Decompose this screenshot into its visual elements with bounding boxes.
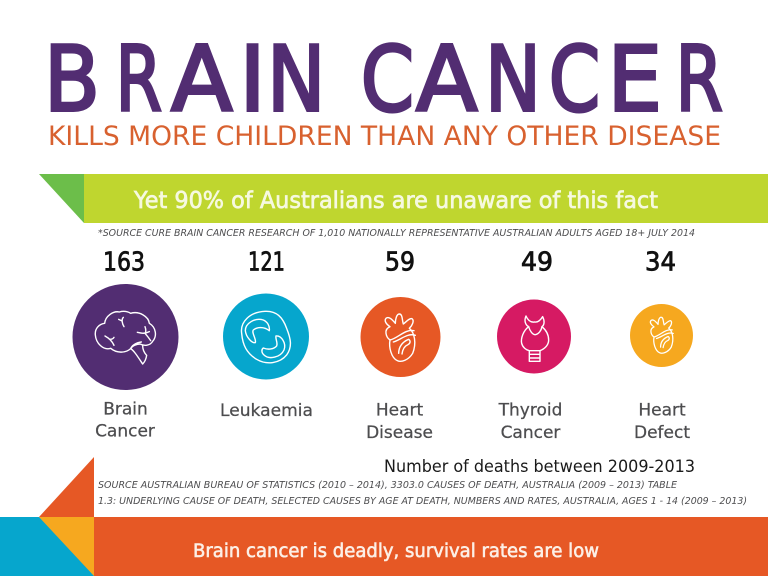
banner bar (94, 517, 768, 576)
banner text: Yet 90% of Australians are unaware of this fact (133, 186, 658, 214)
bottom banner (0, 457, 768, 576)
title: E (608, 28, 662, 132)
green banner (39, 174, 768, 223)
chart caption: Number of deaths between 2009-2013 (384, 457, 695, 476)
icon: brain (95, 311, 155, 364)
number 163: 163 (103, 248, 145, 278)
blue circle (223, 294, 309, 380)
title: N (485, 28, 541, 132)
number 59: 59 (385, 248, 415, 278)
blue corner block (0, 517, 94, 576)
yellow fold triangle (39, 517, 94, 576)
purple circle (72, 284, 178, 390)
title: I (239, 28, 266, 132)
title: B (44, 28, 100, 132)
yellow circle (630, 304, 693, 367)
label: Heart Disease: Disease (366, 423, 433, 443)
title: R (676, 28, 723, 132)
label: Heart Defect: Heart (638, 400, 686, 420)
icon: blood cell (241, 311, 290, 363)
label: Thyroid Cancer: Thyroid (498, 400, 562, 420)
banner text: Brain cancer is deadly, survival rates are low (193, 541, 599, 562)
title: C (549, 28, 600, 132)
label: Leukaemia: Leukaemia (220, 401, 313, 421)
panel: brain cancer (72, 248, 178, 442)
panel: thyroid cancer (497, 248, 571, 443)
panel: heart defect (630, 248, 693, 443)
panel: leukaemia (220, 248, 313, 421)
label: Brain Cancer: Cancer (95, 422, 155, 442)
mortality source note: 1.3: UNDERLYING CAUSE OF DEATH, SELECTED CAUSES BY AGE AT DEATH, NUMBERS AND RATES, AUSTRALIA, AGES 1 - 14 (2009 – 2013) (98, 496, 747, 507)
banner fold triangle (39, 174, 84, 223)
label: Thyroid Cancer: Cancer (501, 423, 560, 443)
title: C (361, 28, 414, 132)
title: A (171, 28, 233, 132)
mortality source note: SOURCE AUSTRALIAN BUREAU OF STATISTICS (2010 – 2014), 3303.0 CAUSES OF DEATH, AUSTRALIA (2009 – 2013) TABLE (98, 480, 678, 491)
icon: small heart (650, 317, 673, 353)
panel: heart disease (360, 248, 440, 443)
label: Heart Defect: Defect (634, 423, 690, 443)
orange circle (360, 297, 440, 377)
label: Heart Disease: Heart (376, 400, 423, 420)
survey source note: *SOURCE CURE BRAIN CANCER RESEARCH OF 1,010 NATIONALLY REPRESENTATIVE AUSTRALIAN ADULTS AGED 18+ JULY 2014 (98, 228, 695, 239)
label: Brain Cancer: Brain (103, 400, 148, 420)
subtitle: KILLS MORE CHILDREN THAN ANY OTHER DISEASE (48, 121, 721, 152)
title: R (116, 28, 162, 132)
pink circle (497, 300, 571, 374)
number 49: 49 (521, 248, 553, 278)
orange corner triangle (39, 457, 94, 517)
number 121: 121 (248, 248, 285, 278)
title: N (267, 28, 326, 132)
banner bar (84, 174, 768, 223)
title: A (416, 28, 478, 132)
number 34: 34 (645, 248, 676, 278)
icon: thyroid (521, 316, 549, 361)
icon: heart (385, 314, 415, 361)
